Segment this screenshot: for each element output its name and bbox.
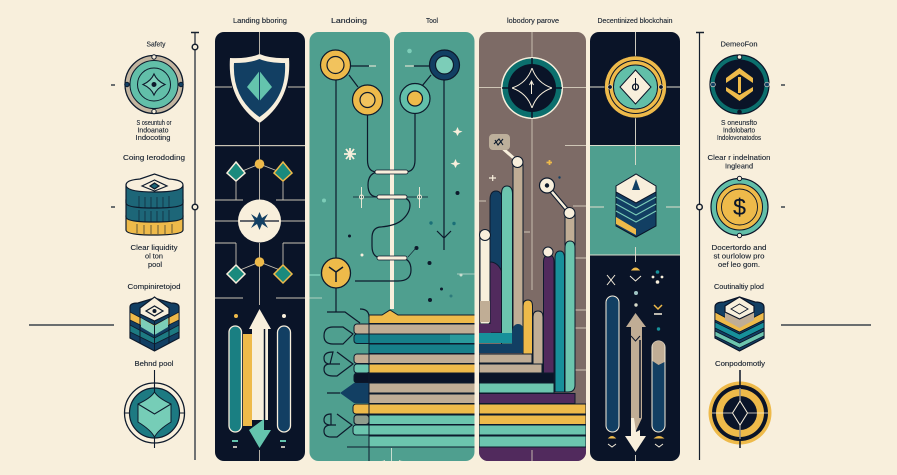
panel: green column two <box>394 32 474 461</box>
column headings: lobodory parove <box>507 16 559 25</box>
label: coutinaltiy plod: Coutinaltiy plod <box>714 282 764 291</box>
chart: vertical bars <box>479 160 575 392</box>
panel: bridge joining the green columns <box>385 309 399 461</box>
text: safety description: Indocoting <box>136 133 170 142</box>
icon: gold diamond coin <box>604 56 666 118</box>
icon: small markers <box>607 268 663 447</box>
text: safety description <box>136 118 172 142</box>
text: clear liquidity: Clear liquidity <box>130 243 178 252</box>
chart: bars and double arrow <box>606 296 665 452</box>
left column labels and icons <box>123 40 185 448</box>
text: decentralized description: oef leo gom. <box>718 260 760 269</box>
label: clear indelnation: Ingleand <box>725 162 753 170</box>
small cross markers <box>360 187 422 208</box>
wire pills <box>375 170 408 260</box>
icon: layered pool <box>130 297 179 351</box>
panel: green column one <box>310 32 390 461</box>
column headings: Tool <box>426 16 438 25</box>
icon: behind pool coin <box>124 370 184 448</box>
icon: dollar coin <box>711 176 768 238</box>
panel: navy lending column <box>215 32 305 461</box>
label: conpodomotly: Conpodomotly <box>715 359 765 368</box>
text: demeofon description: Indolobarto <box>723 126 755 134</box>
icon: shield <box>230 54 289 123</box>
icon: node yellow two <box>352 85 382 115</box>
label: clear indelnation: Clear r indelnation <box>708 153 770 162</box>
right axis <box>696 32 871 460</box>
panel: blockchain column <box>590 32 680 461</box>
chart: horizontal stacked stripes right <box>479 324 586 447</box>
label: safety: Safety <box>146 40 166 48</box>
label: demeofon: DemeoFon <box>720 40 758 48</box>
text: safety description: Indoanato <box>138 126 168 134</box>
connector wires across green columns <box>353 114 428 281</box>
icon: dollar coin: $ <box>733 194 746 220</box>
label: clear indelnation <box>708 153 770 170</box>
sparkles <box>428 127 462 302</box>
icon: data stack <box>616 174 656 237</box>
text: clear liquidity: pool <box>148 260 162 269</box>
text: demeofon description: Indolovonatodos <box>717 133 761 142</box>
icon: gold ring coin <box>708 370 772 448</box>
icon: coin stack <box>126 174 183 235</box>
left axis <box>29 32 199 460</box>
column headings: Landing bboring <box>233 16 287 25</box>
icon: safety coin <box>125 55 183 114</box>
icon: node navy <box>413 50 460 250</box>
text: demeofon description <box>717 118 761 142</box>
icon: central star disc <box>238 200 281 242</box>
text: decentralized description <box>712 243 766 269</box>
panel: taupe column <box>479 32 586 461</box>
icon: upper network diamonds <box>227 159 292 181</box>
icon: layered pool right <box>715 297 764 351</box>
icon: asterisk sparkle <box>344 148 356 160</box>
label: compiniretojod: Compiniretojod <box>128 282 180 291</box>
icon: node teal <box>400 84 430 114</box>
text: clear liquidity <box>130 243 178 269</box>
text: demeofon description: S oneunsfto <box>721 118 757 127</box>
label: behind pool: Behnd pool <box>134 359 174 368</box>
text: clear liquidity: ol ton <box>145 252 163 260</box>
icon: star disc <box>501 57 563 119</box>
icon: connector knobs <box>480 134 575 257</box>
column headings <box>233 16 672 25</box>
right column labels and icons <box>708 40 772 448</box>
column headings: Decentinized blockchain <box>598 16 672 25</box>
text: safety description: S oseuntuh or <box>136 118 172 127</box>
text: decentralized description: Docertordo and <box>712 243 766 252</box>
chart: horizontal stacked stripes across green columns <box>324 309 478 461</box>
column headings: Landoing <box>331 16 367 25</box>
label: coin: Coing Ierododing <box>123 153 185 162</box>
stripe connectors <box>324 309 369 437</box>
icon: hexagon coin <box>710 55 769 114</box>
text: decentralized description: st ourlolow pro <box>714 252 764 260</box>
chart: arrow and bars <box>229 309 290 448</box>
icon: lower network diamonds <box>227 257 292 283</box>
icon: node yellow one <box>320 50 369 312</box>
icon: y node <box>322 258 350 288</box>
